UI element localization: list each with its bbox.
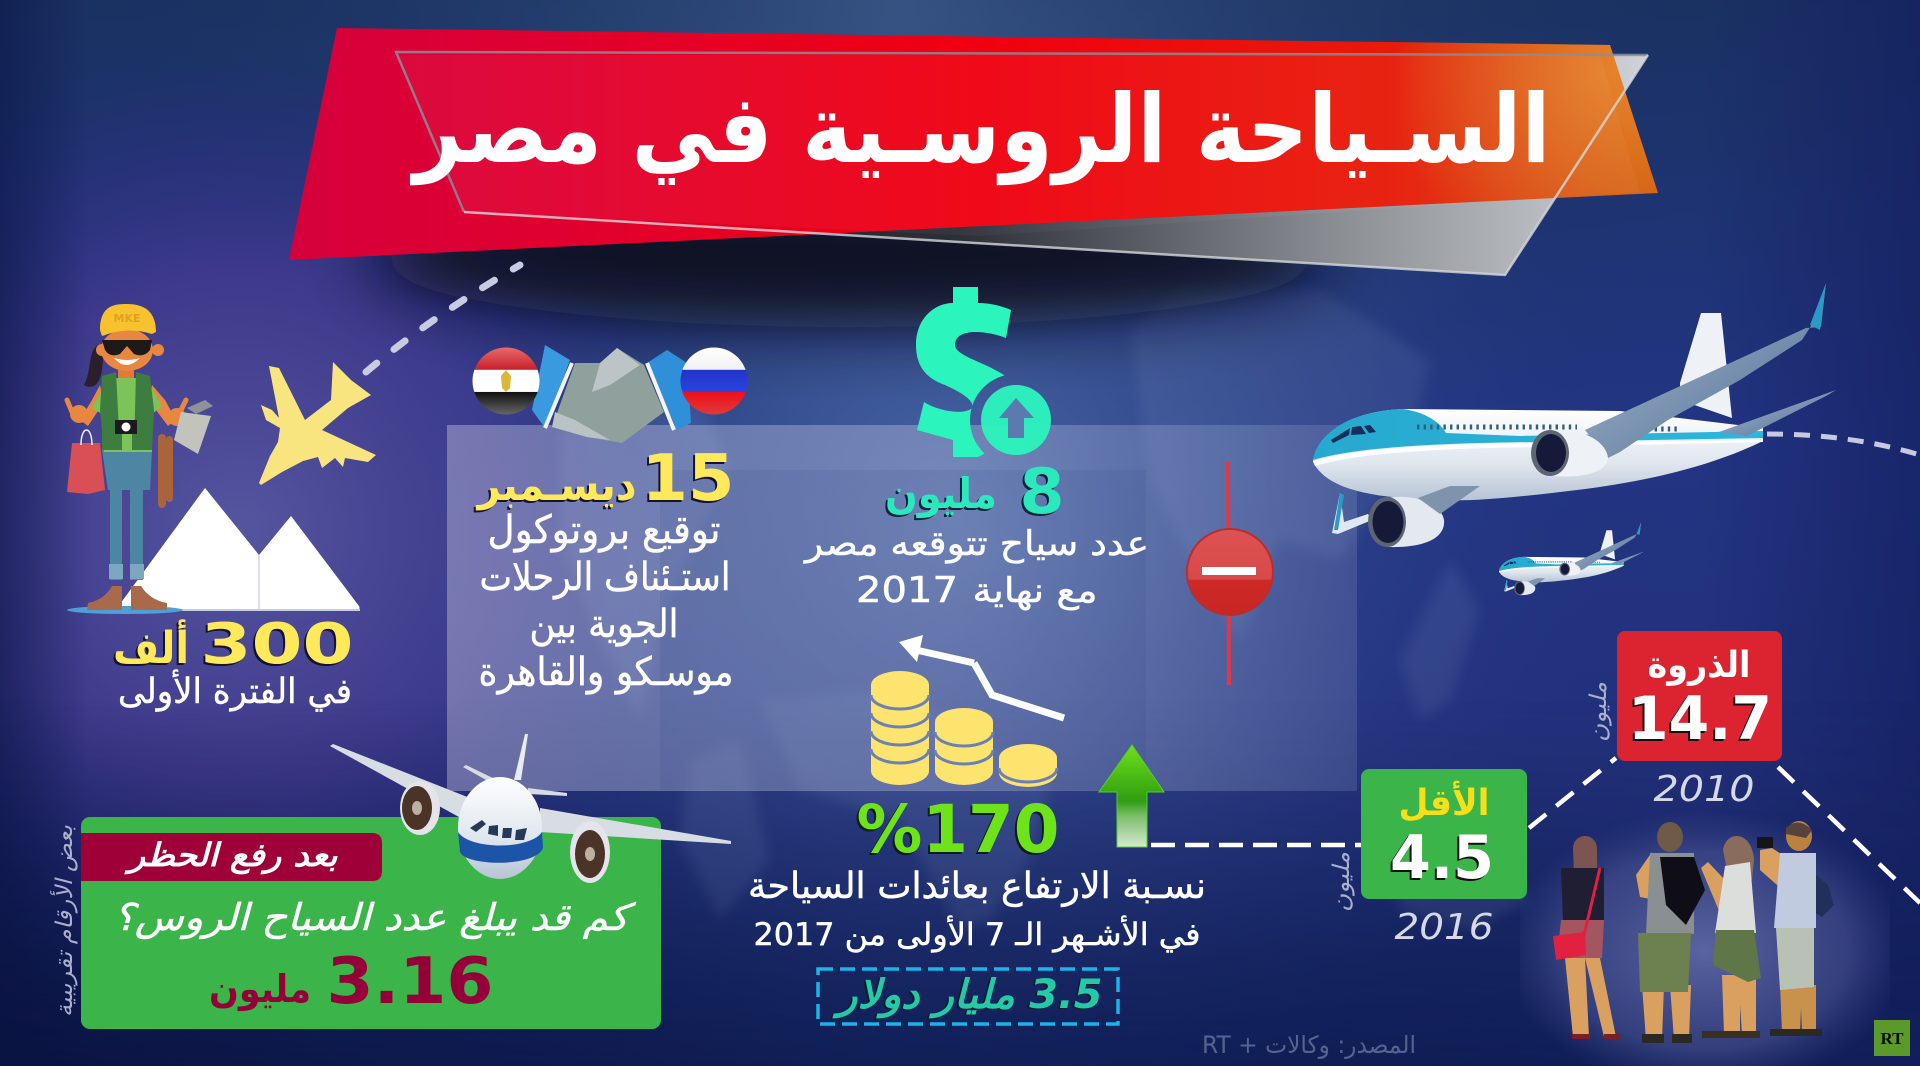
icon: right cuff (647, 350, 691, 430)
ground shadow (67, 606, 183, 614)
stat: 8 million: مليون (885, 469, 997, 519)
icon: no-entry sign on line (1187, 462, 1273, 685)
flag handshake group (472, 345, 748, 443)
icon: white plane front view (330, 734, 731, 883)
shirt (92, 378, 162, 452)
year 2010: 2010 (1654, 769, 1754, 810)
box: peak 2010 (1617, 631, 1782, 761)
RT logo (1874, 1020, 1910, 1056)
icon: pyramids (119, 488, 360, 611)
person 2 (1636, 822, 1705, 1043)
icon: tourist girl (67, 304, 213, 614)
fuselage (458, 777, 542, 879)
stat: 300 thousand: ألف (113, 619, 189, 674)
title banner (289, 28, 1658, 275)
source: المصدر: وكالات + RT (1202, 1031, 1416, 1059)
icon: small airliner (1499, 522, 1644, 595)
person 3 (1701, 836, 1761, 1038)
icon: coin stacks (871, 671, 1057, 787)
dashed route: big plane tail (1767, 434, 1920, 455)
side note rotated: بعض الأرقام تقريبية (50, 824, 78, 1017)
neck and face (118, 364, 134, 378)
shadow under title (370, 183, 1330, 327)
ponytail (84, 345, 104, 387)
icon: yellow plane (259, 362, 376, 485)
translucent central panel (447, 425, 1357, 791)
person 1 (1553, 836, 1620, 1039)
icon: handshake (552, 348, 664, 443)
text block: protocol (478, 508, 734, 695)
icon: left cuff (532, 345, 570, 428)
sunglasses (102, 340, 152, 355)
vest (100, 372, 120, 450)
text block: revenue rise: نسـبة الارتفاع بعائدات السياحة (748, 866, 1206, 907)
year 2016: 2016 (1394, 907, 1494, 948)
value: 3.16 (326, 945, 494, 1019)
person 4 (1757, 821, 1834, 1036)
coin separators (871, 695, 1057, 782)
arms (80, 385, 104, 426)
pants (102, 450, 152, 490)
red shopping bag (67, 443, 105, 494)
million label near lowest: مليون (1329, 852, 1355, 912)
icon: big airliner (1313, 283, 1836, 547)
text block: tourists expected (803, 524, 1149, 611)
million label near peak: مليون (1586, 682, 1612, 742)
value (209, 945, 494, 1019)
legs (110, 480, 122, 580)
icon: trend arrow (899, 635, 1064, 718)
text block: revenue rise (748, 866, 1206, 953)
sausages (158, 434, 173, 508)
smile (114, 358, 140, 365)
tourists photographers (1520, 810, 1890, 1066)
dashed connector to 2016 box (1151, 843, 1361, 847)
text block: protocol: موسـكو والقاهرة (478, 650, 734, 695)
text block: protocol: توقيع بروتوكول (488, 508, 720, 553)
dashed connectors (1529, 758, 1920, 903)
red banner (289, 28, 1658, 260)
label: بعد رفع الحظر (124, 836, 339, 875)
RT logo: RT (1880, 1029, 1904, 1048)
right engine (570, 821, 610, 883)
glass back plate (396, 52, 1648, 275)
box: peak 2010: الذروة (1648, 645, 1750, 686)
world map watermark (560, 290, 1530, 930)
value: مليون (209, 967, 311, 1011)
stat: 300 thousand: 300 (200, 612, 354, 677)
box: lowest 2016 (1361, 769, 1527, 899)
stat: 300 thousand (113, 612, 354, 712)
text block: revenue rise: في الأشـهر الـ 7 الأولى من 2017 (754, 915, 1200, 953)
icon: Russia flag (680, 348, 748, 414)
text block: protocol: الجوية بين (530, 602, 678, 647)
question: كم قد يبلغ عدد السياح الروس؟ (114, 896, 636, 940)
icon: dollar up (916, 287, 1051, 457)
callout: 3.5 billion dollars: 3.5 مليار دولار (832, 972, 1102, 1019)
text block: tourists expected: عدد سياح تتوقعه مصر (803, 524, 1149, 564)
camera (115, 420, 137, 434)
panel: after the ban lifted (81, 817, 661, 1029)
stat: 300 thousand: في الفترة الأولى (118, 669, 352, 712)
stat: 8 million (885, 455, 1064, 528)
label (81, 833, 382, 881)
left engine (400, 781, 440, 835)
dashed route: yellow plane to title (366, 265, 520, 372)
text block: tourists expected: 2017 (856, 570, 958, 611)
box: lowest 2016: الأقل (1398, 780, 1490, 824)
box: lowest 2016: 4.5 (1390, 823, 1494, 893)
icon: Egypt flag (472, 348, 540, 414)
text block: tourists expected: مع نهاية (972, 571, 1098, 611)
date: 15 December (476, 442, 734, 516)
text block: protocol: استـئناف الرحلات (480, 555, 730, 600)
box: peak 2010: 14.7 (1628, 684, 1772, 754)
date: 15 December: 15 (642, 442, 734, 516)
glass outline (396, 52, 1648, 275)
paper bag (174, 412, 211, 454)
date: 15 December: ديسـمبر (476, 460, 636, 511)
stat: 170 percent: %170 (856, 791, 1060, 868)
icon: green up arrow (1099, 745, 1164, 847)
stat: 8 million: 8 (1020, 455, 1064, 528)
boots (87, 586, 122, 610)
icon: tourist girl: MKE (114, 312, 140, 325)
hat (100, 304, 156, 336)
title text: السـياحة الروسـية في مصر (410, 75, 1551, 185)
